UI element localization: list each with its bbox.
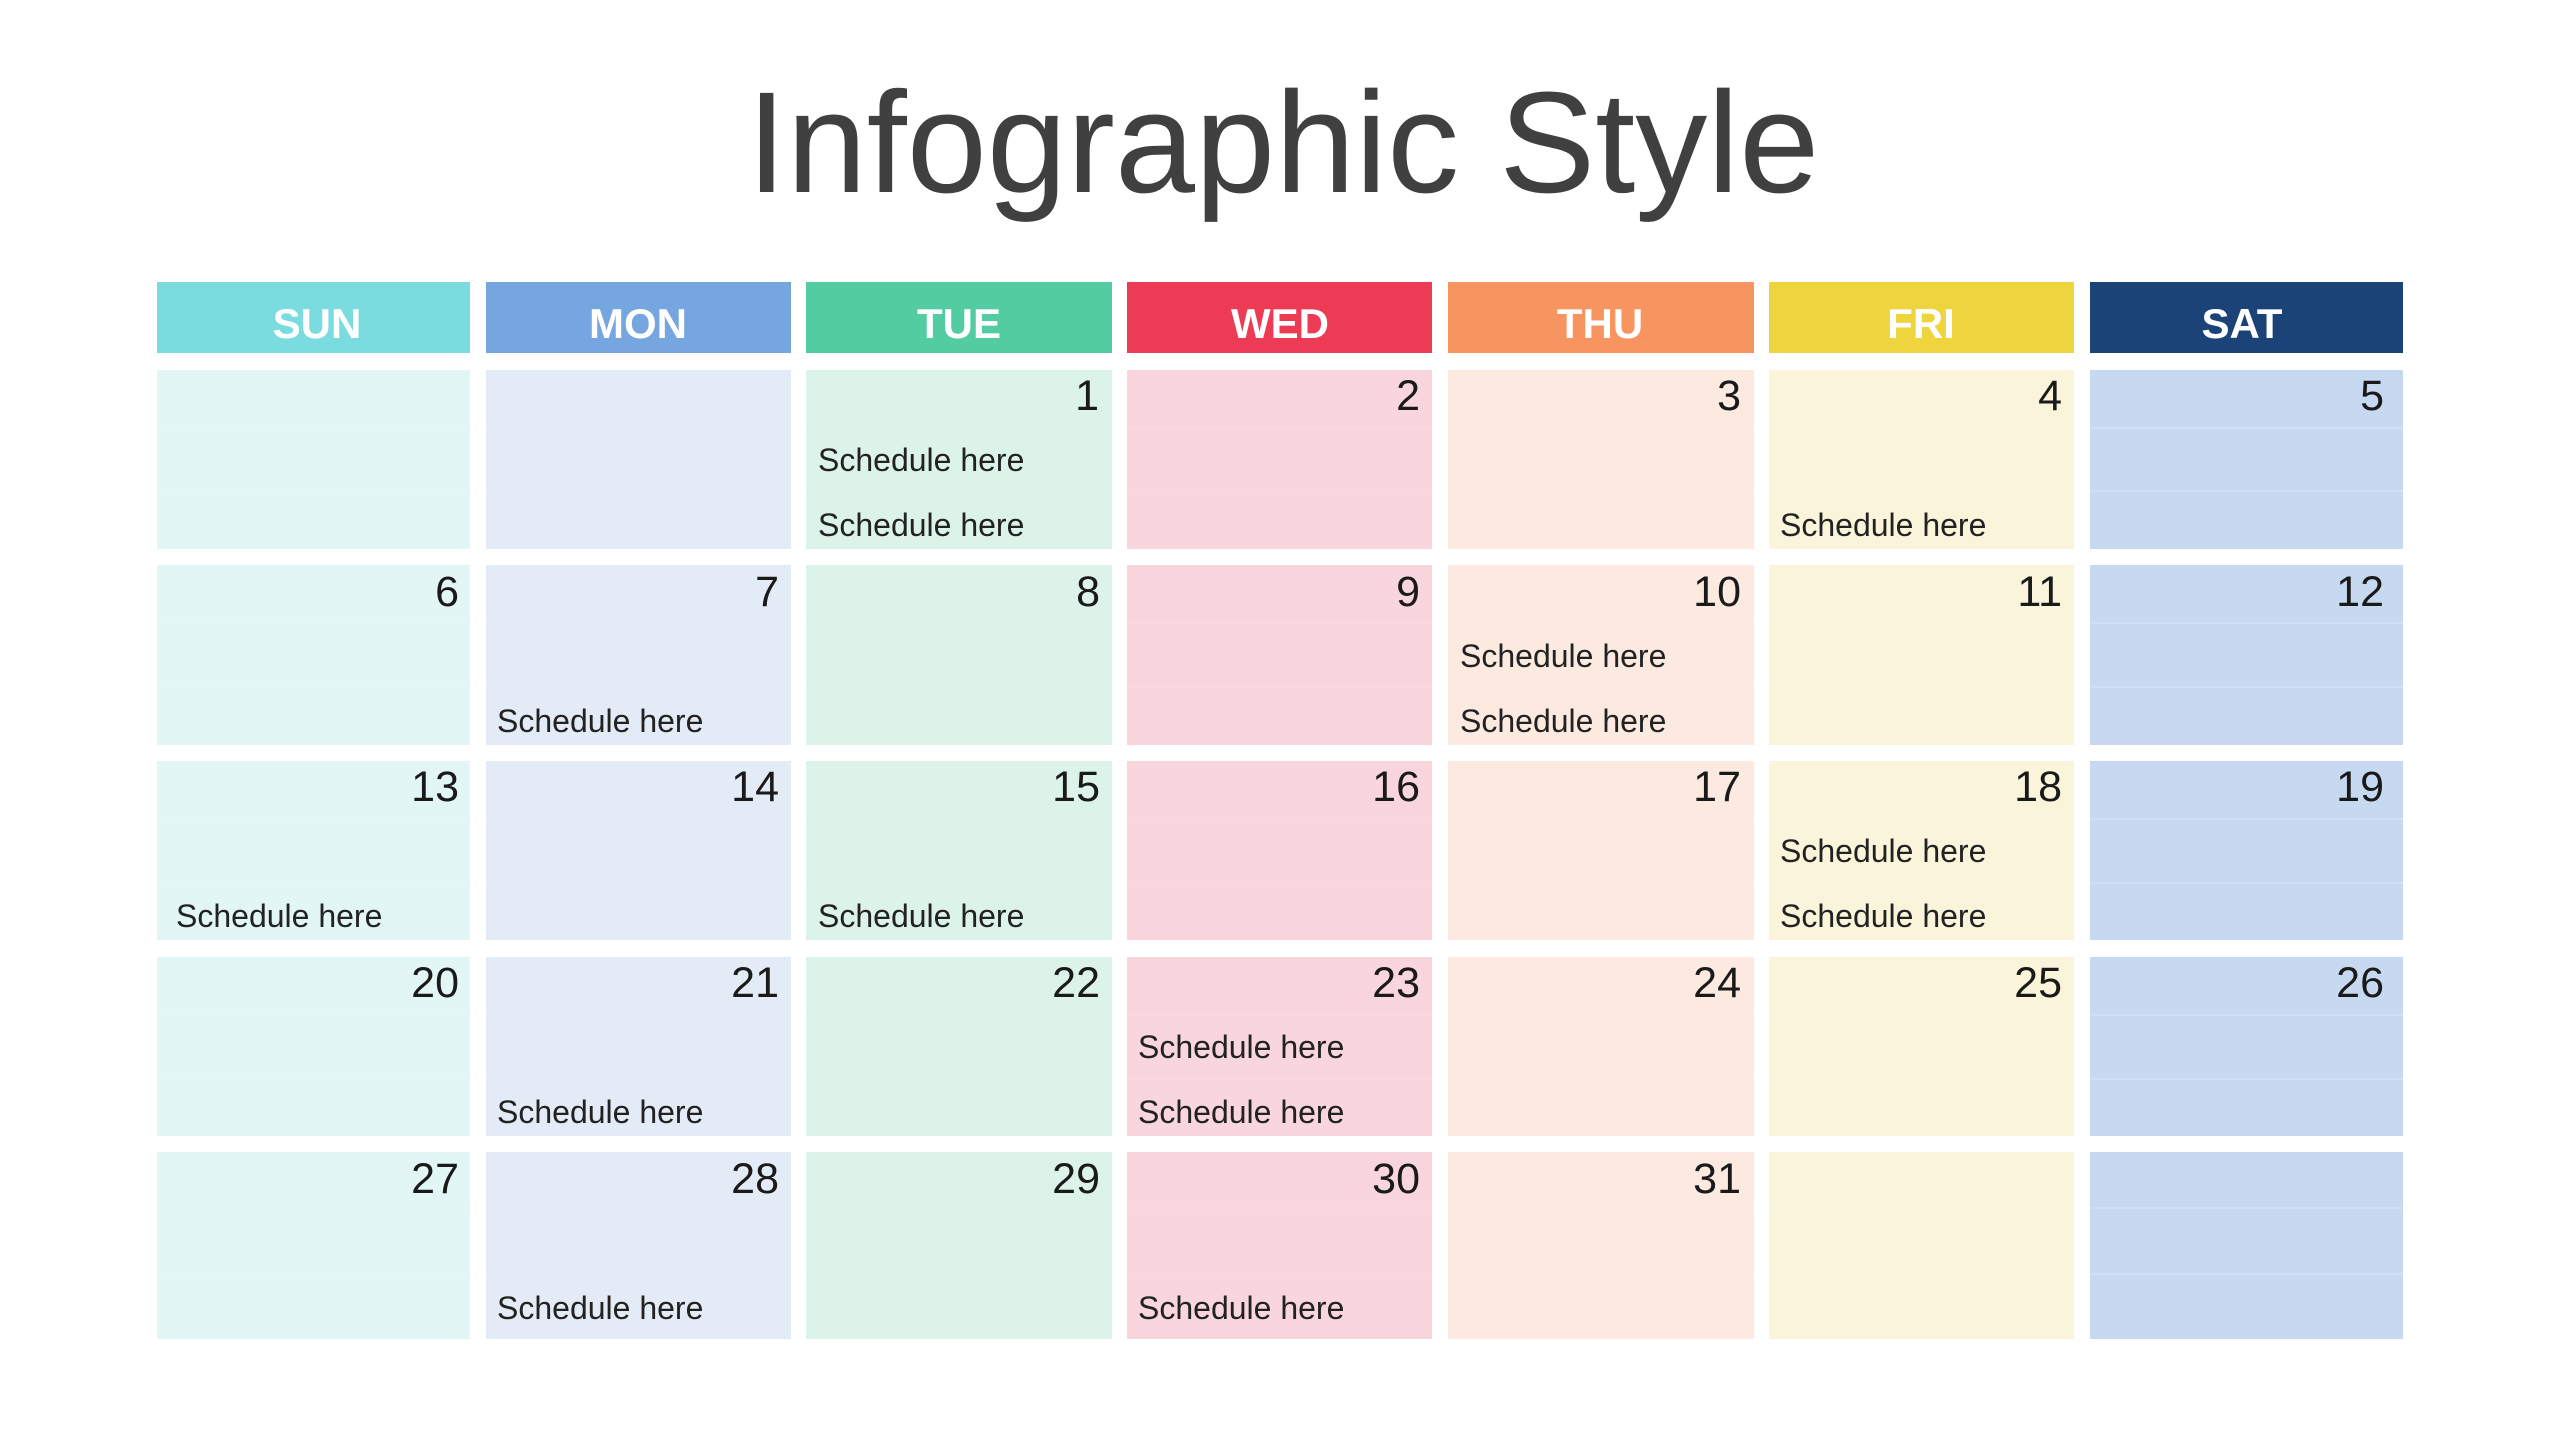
cell: day 10: Schedule here xyxy=(1460,703,1666,739)
cell: day 21: 21 xyxy=(731,959,779,1007)
header: MON: MON xyxy=(589,300,687,347)
calendar week 3 xyxy=(157,761,2403,940)
calendar week 5 xyxy=(157,1152,2403,1339)
cell: day 1 xyxy=(806,370,1112,549)
cell: day 23: Schedule here xyxy=(1138,1029,1344,1065)
cell: day 7 xyxy=(486,565,791,745)
header: MON xyxy=(486,282,791,353)
cell: day 8 xyxy=(806,565,1112,745)
cell: day 28: 28 xyxy=(731,1155,779,1203)
header: WED: WED xyxy=(1231,300,1329,347)
cell: empty Sunday xyxy=(157,370,470,549)
cell: day 26 xyxy=(2090,957,2403,1136)
cell: day 18 xyxy=(1769,761,2074,940)
cell: day 1: 1 xyxy=(1075,372,1099,420)
cell: day 23 xyxy=(1127,957,1432,1136)
title: Infographic Style xyxy=(747,62,1819,223)
weekday header row xyxy=(157,282,2403,353)
cell: day 17: 17 xyxy=(1693,763,1741,811)
cell: day 6: 6 xyxy=(435,568,459,616)
cell: day 2 xyxy=(1127,370,1432,549)
cell: day 30: Schedule here xyxy=(1138,1290,1344,1326)
calendar week 1 xyxy=(157,370,2403,549)
cell: empty Friday xyxy=(1769,1152,2074,1339)
cell: day 4 xyxy=(1769,370,2074,549)
cell: day 4: Schedule here xyxy=(1780,507,1986,543)
cell: day 31: 31 xyxy=(1693,1155,1741,1203)
cell: day 24: 24 xyxy=(1693,959,1741,1007)
cell: day 18: Schedule here xyxy=(1780,898,1986,934)
cell: day 11: 11 xyxy=(2017,568,2062,616)
cell: day 30 xyxy=(1127,1152,1432,1339)
cell: day 25 xyxy=(1769,957,2074,1136)
cell: day 13: Schedule here xyxy=(176,898,382,934)
header: TUE: TUE xyxy=(917,300,1001,347)
cell: day 23: Schedule here xyxy=(1138,1094,1344,1130)
header: THU: THU xyxy=(1557,300,1643,347)
cell: day 5 xyxy=(2090,370,2403,549)
cell: day 13: 13 xyxy=(411,763,459,811)
cell: day 4: 4 xyxy=(2038,372,2062,420)
cell: day 10: Schedule here xyxy=(1460,638,1666,674)
header: SAT xyxy=(2090,282,2403,353)
calendar week 2 xyxy=(157,565,2403,745)
cell: day 18: Schedule here xyxy=(1780,833,1986,869)
cell: empty Monday xyxy=(486,370,791,549)
cell: day 22: 22 xyxy=(1052,959,1100,1007)
cell: day 25: 25 xyxy=(2014,959,2062,1007)
header: THU xyxy=(1448,282,1754,353)
cell: day 12 xyxy=(2090,565,2403,745)
cell: day 21 xyxy=(486,957,791,1136)
header: SUN: SUN xyxy=(273,300,361,347)
calendar week 4 xyxy=(157,957,2403,1136)
cell: day 18: 18 xyxy=(2014,763,2062,811)
cell: day 8: 8 xyxy=(1076,568,1100,616)
cell: day 20 xyxy=(157,957,470,1136)
cell: day 15: Schedule here xyxy=(818,898,1024,934)
cell: day 19: 19 xyxy=(2336,763,2384,811)
cell: day 19 xyxy=(2090,761,2403,940)
cell: day 21: Schedule here xyxy=(497,1094,703,1130)
cell: day 31 xyxy=(1448,1152,1754,1339)
cell: day 3 xyxy=(1448,370,1754,549)
cell: day 26: 26 xyxy=(2336,959,2384,1007)
cell: day 27: 27 xyxy=(411,1155,459,1203)
cell: day 29 xyxy=(806,1152,1112,1339)
cell: day 5: 5 xyxy=(2360,372,2384,420)
cell: day 2: 2 xyxy=(1396,372,1420,420)
cell: day 11 xyxy=(1769,565,2074,745)
cell: day 24 xyxy=(1448,957,1754,1136)
cell: day 6 xyxy=(157,565,470,745)
cell: day 14 xyxy=(486,761,791,940)
header: SUN xyxy=(157,282,470,353)
header: FRI xyxy=(1769,282,2074,353)
cell: day 7: Schedule here xyxy=(497,703,703,739)
header: FRI: FRI xyxy=(1887,300,1955,347)
cell: day 1: Schedule here xyxy=(818,507,1024,543)
cell: day 7: 7 xyxy=(755,568,779,616)
cell: day 15 xyxy=(806,761,1112,940)
cell: day 29: 29 xyxy=(1052,1155,1100,1203)
cell: day 27 xyxy=(157,1152,470,1339)
cell: day 16 xyxy=(1127,761,1432,940)
cell: day 13 xyxy=(157,761,470,940)
cell: empty Saturday xyxy=(2090,1152,2403,1339)
cell: day 14: 14 xyxy=(731,763,779,811)
cell: day 16: 16 xyxy=(1372,763,1420,811)
header: TUE xyxy=(806,282,1112,353)
cell: day 10 xyxy=(1448,565,1754,745)
cell: day 22 xyxy=(806,957,1112,1136)
cell: day 1: Schedule here xyxy=(818,442,1024,478)
cell: day 15: 15 xyxy=(1052,763,1100,811)
cell: day 23: 23 xyxy=(1372,959,1420,1007)
cell: day 17 xyxy=(1448,761,1754,940)
cell: day 28 xyxy=(486,1152,791,1339)
cell: day 20: 20 xyxy=(411,959,459,1007)
cell: day 9 xyxy=(1127,565,1432,745)
cell: day 28: Schedule here xyxy=(497,1290,703,1326)
header: SAT: SAT xyxy=(2202,300,2283,347)
header: WED xyxy=(1127,282,1432,353)
cell: day 10: 10 xyxy=(1693,568,1741,616)
cell: day 12: 12 xyxy=(2336,568,2384,616)
cell: day 9: 9 xyxy=(1396,568,1420,616)
cell: day 3: 3 xyxy=(1717,372,1741,420)
cell: day 30: 30 xyxy=(1372,1155,1420,1203)
